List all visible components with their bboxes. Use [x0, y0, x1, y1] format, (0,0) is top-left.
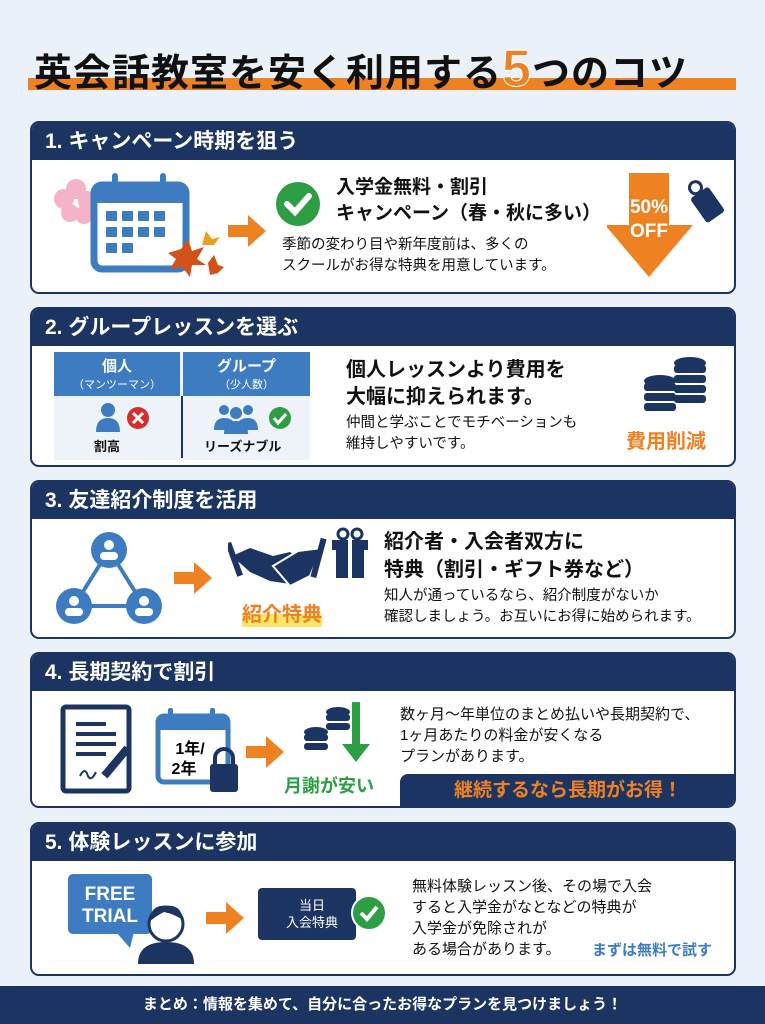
icon: 50% off arrow: OFF [630, 221, 668, 242]
text: campaign: キャンペーン（春・秋に多い） [336, 203, 601, 224]
footer: まとめ：情報を集めて、自分に合ったお得なプランを見つけましょう！ [143, 996, 622, 1013]
text: description 3: 知人が通っているなら、紹介制度がないか [384, 588, 659, 604]
text: cost [346, 358, 566, 408]
comparison table: 個人 [102, 358, 132, 375]
heading 5: 5. 体験レッスンに参加 [45, 831, 257, 854]
comparison table: リーズナブル [204, 439, 281, 454]
text: description 5: 入学金が免除されが [412, 920, 547, 937]
text: description 2 [346, 414, 577, 452]
icon: ticket with check [258, 888, 385, 940]
heading 2: 2. グループレッスンを選ぶ [45, 316, 298, 339]
label: cost reduction: 費用削減 [626, 431, 706, 453]
heading 1 [32, 123, 734, 160]
text: description 1 [282, 236, 556, 274]
heading 1: 1. キャンペーン時期を狙う [45, 130, 298, 153]
icon: free trial person: TRIAL [82, 906, 138, 927]
heading 2 [32, 309, 734, 346]
text: description 2: 維持しやすいです。 [346, 436, 474, 452]
icon: calendar with sakura and leaves [54, 173, 224, 277]
text: description 4 [400, 706, 699, 765]
panel 4 [30, 652, 736, 808]
icon: 50% off arrow: 50% [630, 197, 668, 218]
footer [0, 986, 765, 1024]
heading 4 [32, 654, 734, 691]
icon: calendar lock: 1年/ [175, 739, 205, 758]
panel 1 [30, 121, 736, 294]
arrow [206, 902, 244, 934]
text: description 2: 仲間と学ぶことでモチベーションも [346, 415, 577, 431]
text: description 4: 数ヶ月〜年単位のまとめ払いや長期契約で、 [400, 706, 699, 723]
icon: calendar lock: 2年 [172, 759, 196, 778]
icon: coins down [304, 702, 370, 762]
text: description 5: すると入学金がなとなどの特典が [412, 899, 637, 916]
icon: handshake and gift [228, 528, 368, 585]
title: 英会話教室を安く利用する5つのコツ [34, 40, 688, 98]
comparison table: （少人数） [219, 379, 274, 391]
text: benefits: 紹介者・入会者双方に [384, 531, 584, 553]
comparison table: グループ [217, 358, 276, 375]
label: referral benefit: 紹介特典 [242, 604, 322, 626]
icon: contract [60, 704, 132, 794]
banner: long term: 継続するなら長期がお得！ [454, 780, 682, 801]
heading 3: 3. 友達紹介制度を活用 [45, 489, 257, 512]
icon: 50% off arrow [607, 173, 724, 277]
icon: check [276, 182, 320, 226]
panel 3 [30, 480, 736, 639]
banner: long term [400, 774, 736, 808]
label: monthly fee cheap: 月謝が安い [284, 776, 374, 796]
icon: free trial person [68, 874, 194, 964]
text: description 5 [412, 878, 652, 958]
text: description 5: ある場合があります。 [412, 941, 561, 958]
text: campaign [336, 176, 601, 224]
panel 2 [30, 307, 736, 467]
text: benefits [384, 530, 644, 581]
arrow [228, 215, 266, 247]
comparison table: （マンツーマン） [73, 379, 161, 391]
icon: network [56, 532, 162, 624]
icon: calendar lock [156, 708, 238, 792]
heading 3 [32, 482, 734, 519]
text: cost: 大幅に抑えられます。 [346, 386, 544, 408]
text: description 5: 無料体験レッスン後、その場で入会 [412, 878, 652, 895]
icon: coins [644, 357, 706, 411]
icon: free trial person: FREE [85, 884, 135, 905]
text: description 1: 季節の変わり目や新年度前は、多くの [282, 237, 528, 253]
heading 4: 4. 長期契約で割引 [45, 661, 215, 684]
text: cost: 個人レッスンより費用を [346, 359, 566, 381]
text: description 3 [384, 587, 701, 625]
text: description 4: プランがあります。 [400, 748, 534, 765]
icon: ticket with check: 入会特典 [286, 915, 338, 930]
panel 5 [30, 822, 736, 976]
text: benefits: 特典（割引・ギフト券など） [384, 559, 644, 581]
arrow [246, 736, 284, 768]
text: description 1: スクールがお得な特典を用意しています。 [282, 258, 556, 274]
text: description 3: 確認しましょう。お互いにお得に始められます。 [384, 609, 701, 625]
text: description 4: 1ヶ月あたりの料金が安くなる [400, 727, 603, 744]
arrow [174, 562, 212, 594]
comparison table [54, 352, 310, 460]
icon: ticket with check: 当日 [299, 898, 325, 913]
label: try free: まずは無料で試す [592, 942, 712, 959]
comparison table: 割高 [94, 439, 120, 454]
heading 5 [32, 824, 734, 861]
text: campaign: 入学金無料・割引 [336, 177, 488, 198]
